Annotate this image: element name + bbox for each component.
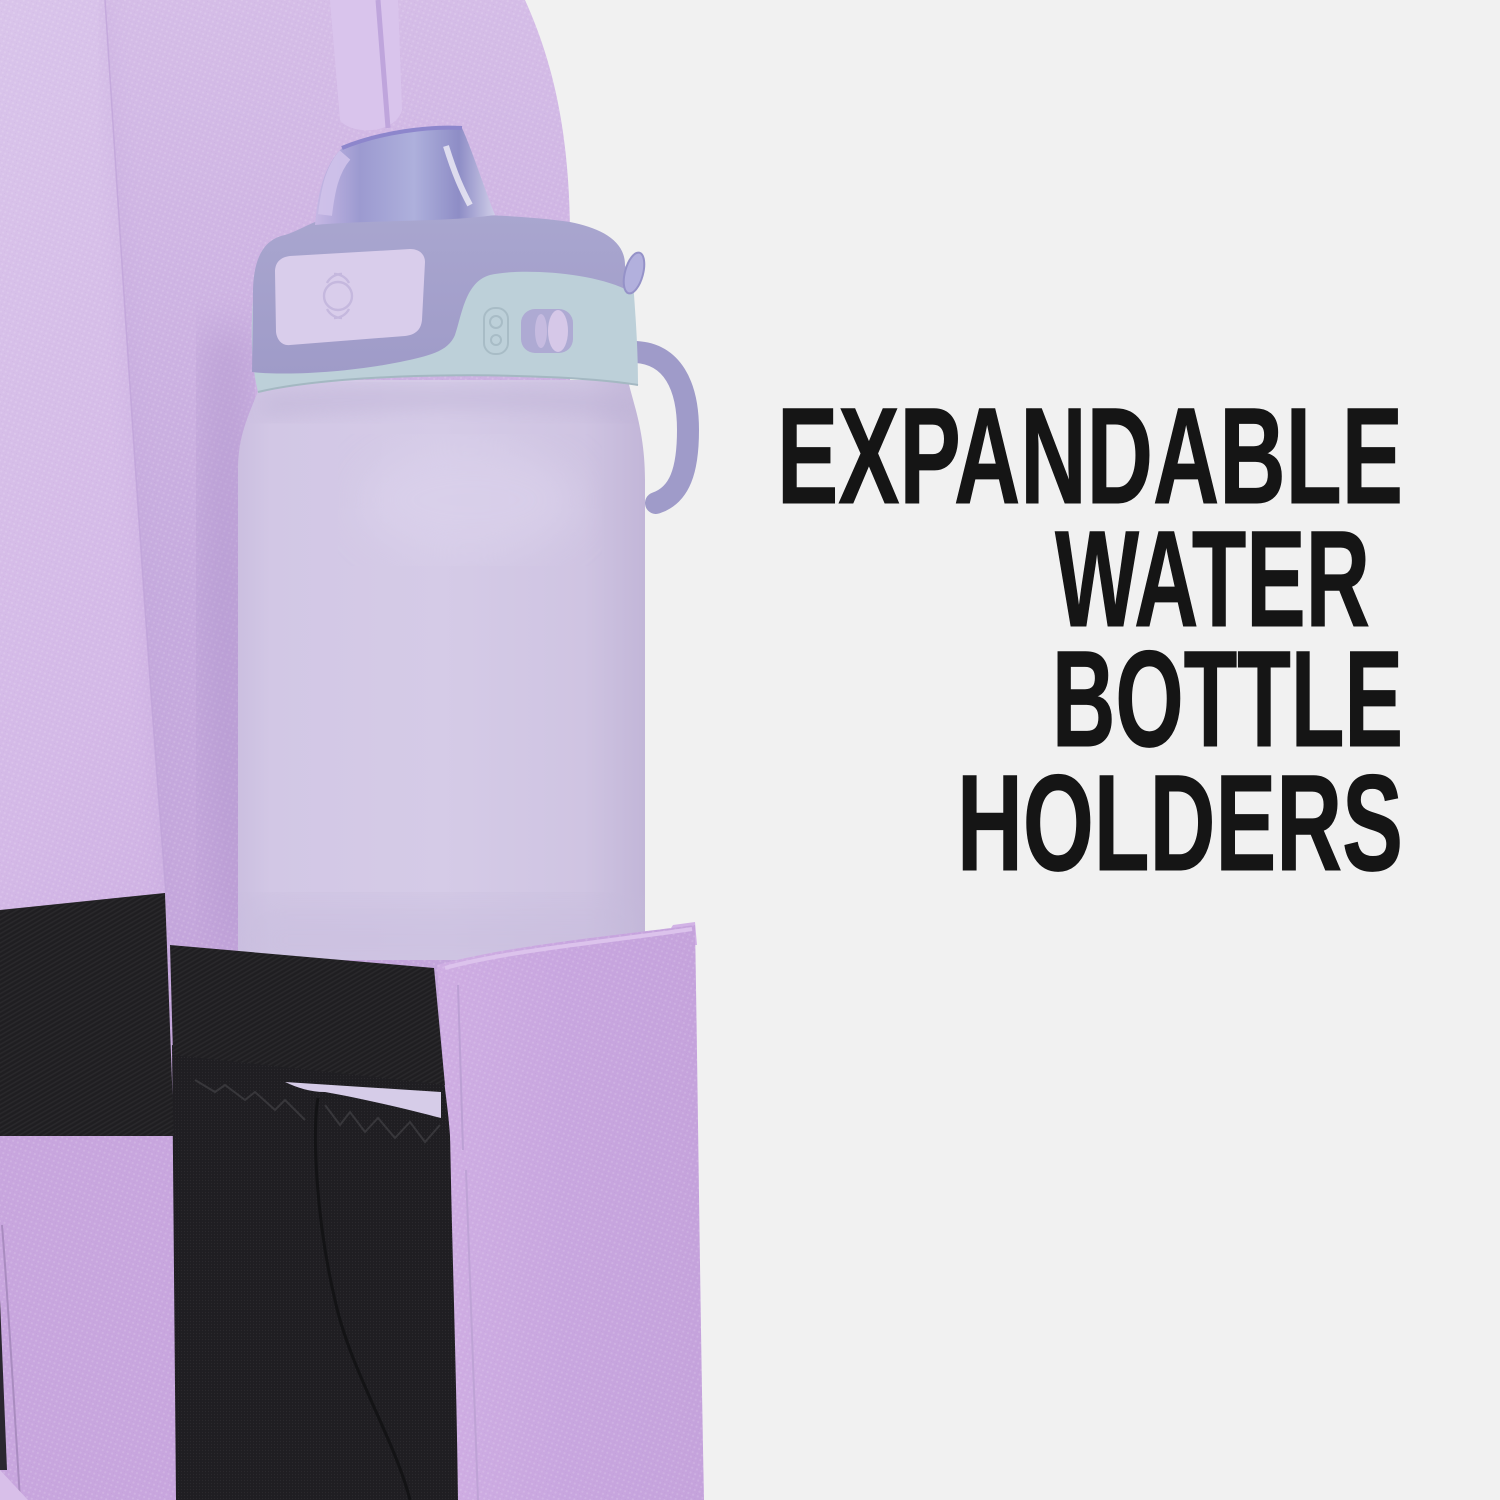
spout	[315, 128, 495, 225]
black webbing strap left	[0, 893, 174, 1136]
top zipper tape	[330, 0, 402, 130]
bottle body	[238, 380, 645, 960]
water bottle	[238, 128, 688, 980]
lock icon	[484, 308, 508, 354]
pocket back lip	[660, 922, 697, 945]
front panel of backpack	[0, 0, 166, 1500]
body shading	[256, 126, 645, 412]
lock window	[521, 309, 573, 353]
lower seam	[2, 1225, 20, 1500]
lid pin	[620, 250, 648, 296]
button	[275, 249, 425, 345]
side pocket	[437, 922, 704, 1500]
lower left panel	[0, 1135, 176, 1500]
backpack body	[0, 0, 570, 1500]
heading	[777, 380, 1403, 900]
bottle seen through gap	[285, 1082, 441, 1118]
slider	[548, 310, 568, 352]
side panel of backpack	[0, 0, 570, 1500]
pocket stitching	[458, 985, 463, 1150]
collar	[252, 268, 638, 392]
pocket edge highlight	[445, 929, 692, 968]
spout highlights	[446, 146, 470, 205]
mesh fold	[315, 1098, 410, 1500]
spout rim	[342, 128, 462, 148]
pocket fabric	[437, 925, 704, 1500]
black webbing strap over pocket	[170, 945, 445, 1085]
mesh pocket	[172, 1045, 460, 1500]
button emblem	[324, 274, 352, 318]
fabric texture	[0, 0, 570, 1500]
collar shadow line	[258, 375, 638, 392]
shadow behind bottle	[201, 330, 250, 950]
panel seam	[105, 0, 166, 895]
mesh hem zigzag	[195, 1080, 440, 1142]
bottle handle loop	[636, 352, 688, 503]
lid	[252, 214, 626, 374]
zipper ridge	[378, 0, 388, 128]
